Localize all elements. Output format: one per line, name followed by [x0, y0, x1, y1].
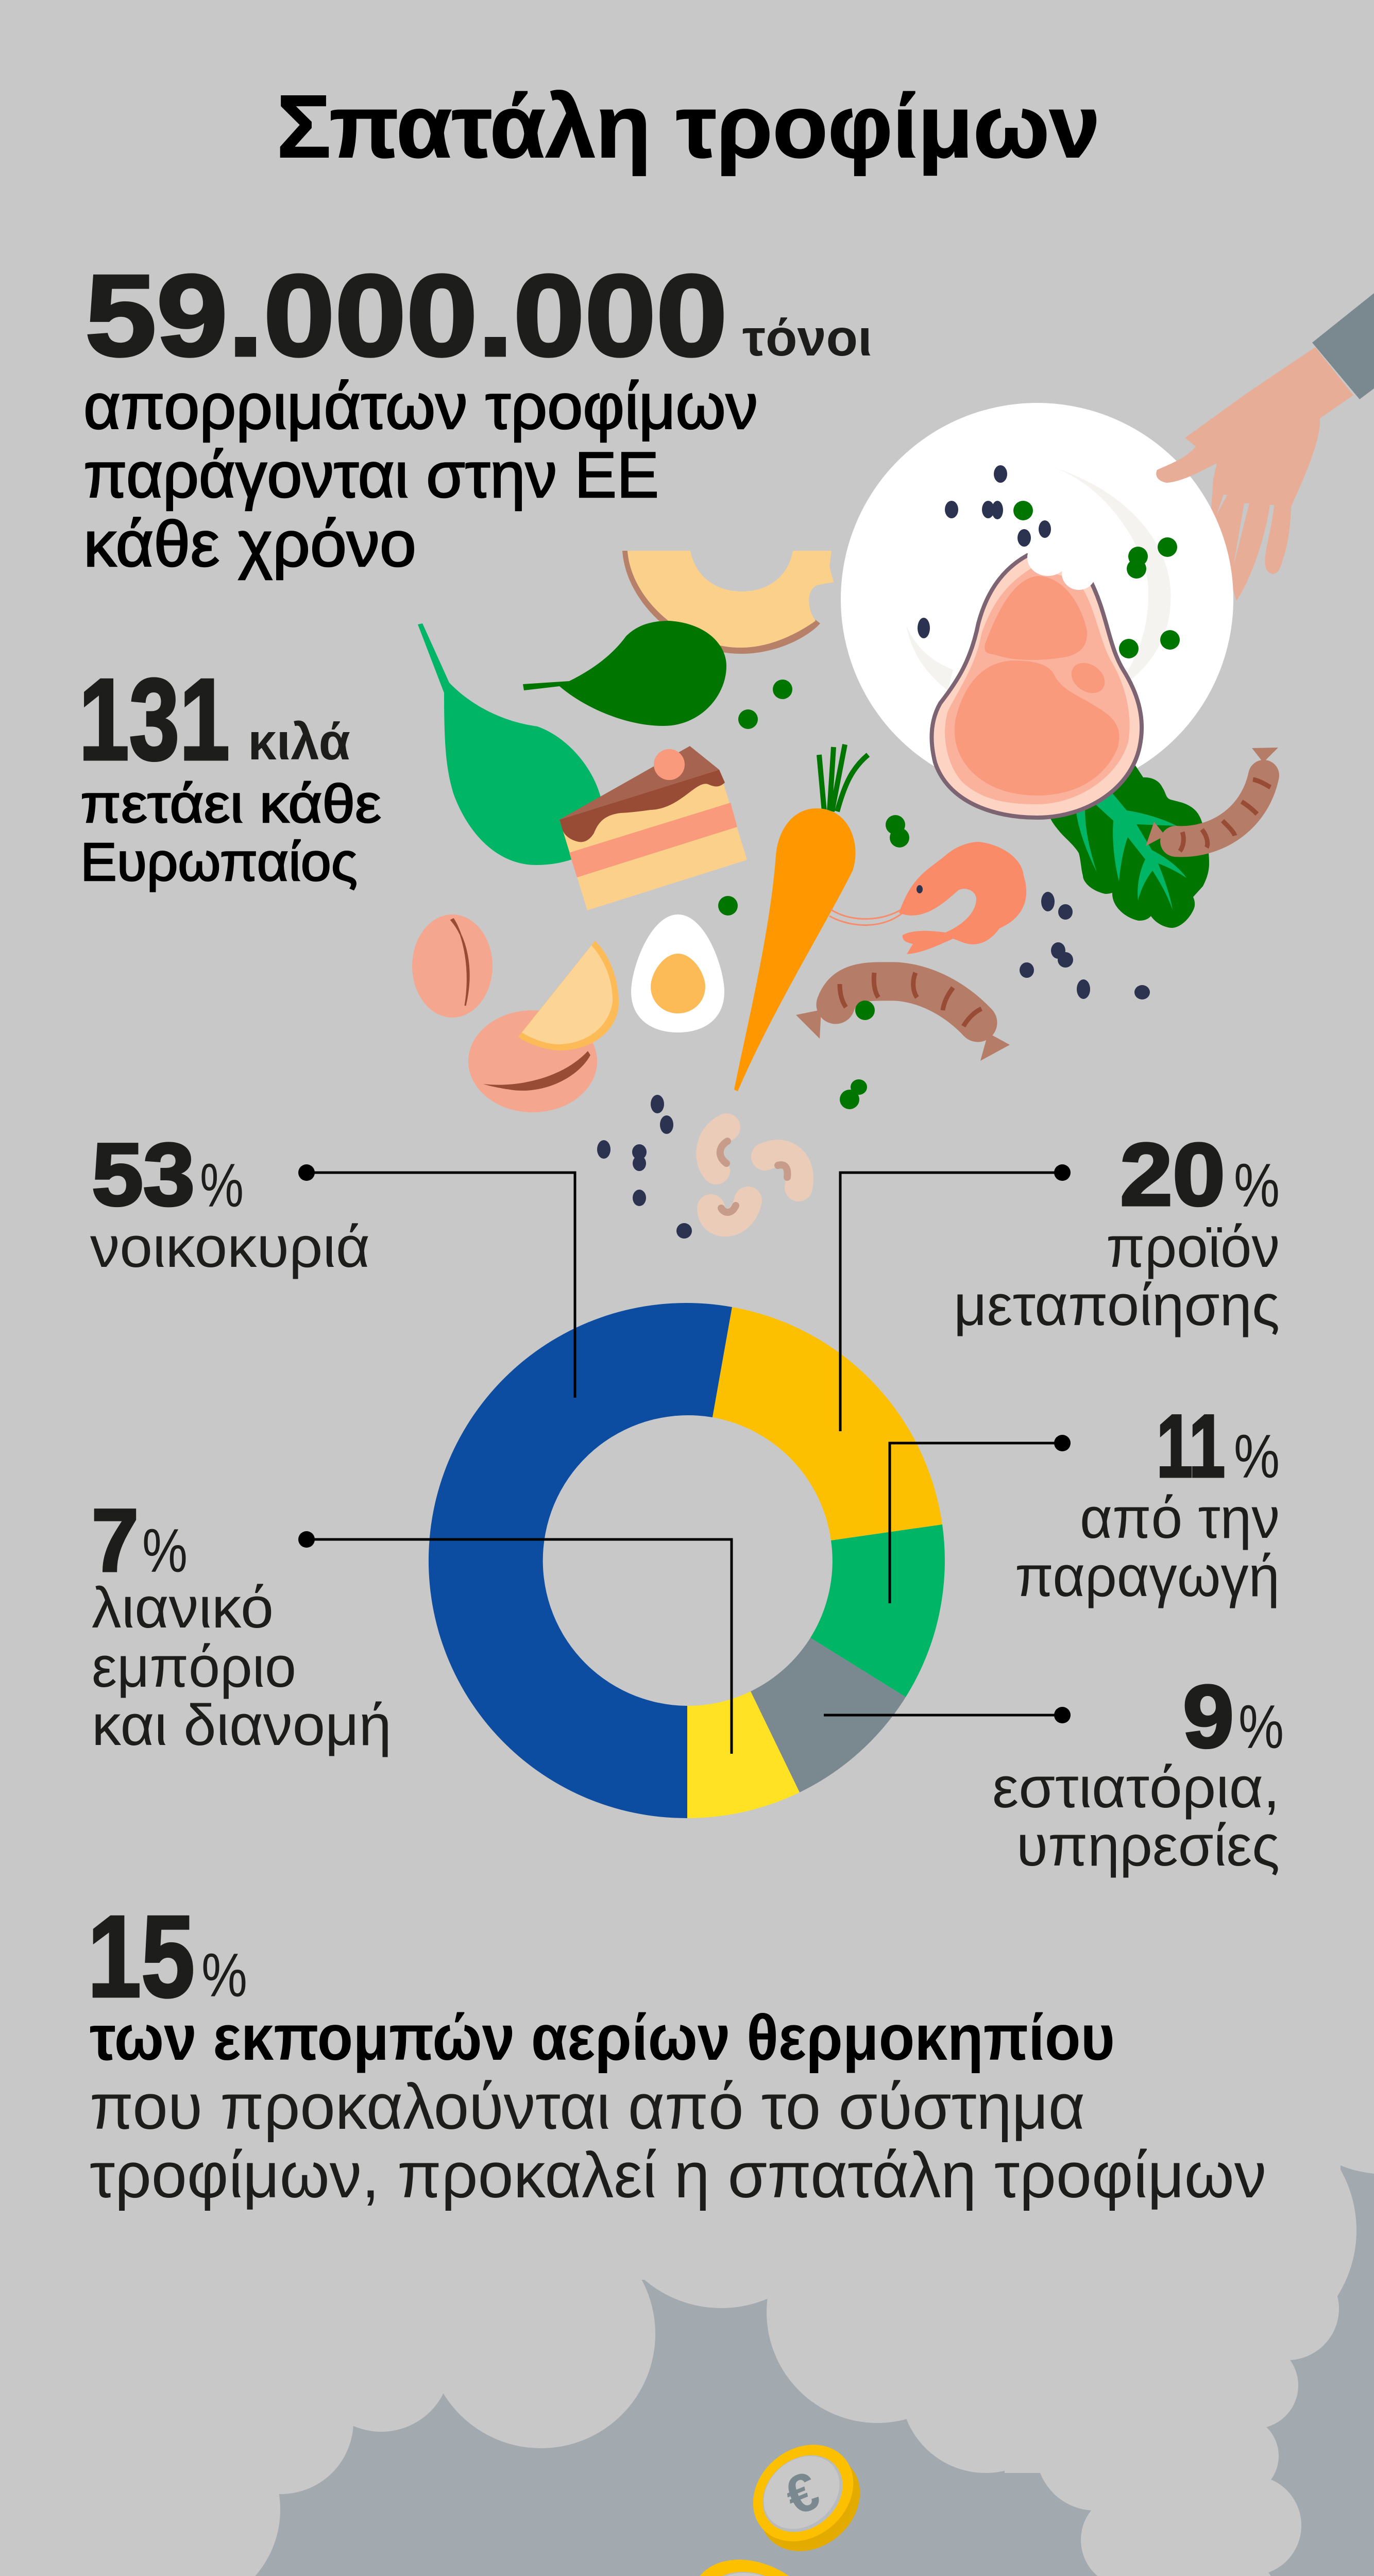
label: 20% processing: % [1234, 1151, 1280, 1220]
label: 53% households [90, 1125, 370, 1279]
label: 20% processing [954, 1125, 1280, 1337]
stat: 131 kilos [79, 654, 381, 892]
bright green leaf [418, 623, 602, 865]
coin top: € [777, 2460, 827, 2527]
scattered peas [718, 680, 909, 1109]
label: 7% retail: 7 [92, 1491, 139, 1590]
unit kilos: κιλά [248, 713, 350, 771]
label: 7% retail: λιανικό [92, 1575, 274, 1640]
thumb [1156, 394, 1288, 483]
label: 11% production: από την [1080, 1486, 1280, 1550]
description line 2: Ευρωπαίος [80, 832, 358, 892]
description line 2: παράγονται στην ΕΕ [83, 439, 659, 511]
shrimp [829, 842, 1026, 954]
cashews [710, 1127, 800, 1223]
cake slice [559, 746, 747, 910]
donut chart [429, 1303, 945, 1818]
number 131: 131 [79, 654, 230, 784]
label: 20% processing: μεταποίησης [954, 1273, 1280, 1337]
label: 7% retail: εμπόριο [92, 1635, 296, 1699]
spinach [1050, 764, 1209, 928]
stat: 15% emissions: 15 [88, 1891, 195, 2021]
label: 9% restaurants: εστιατόρια, [992, 1755, 1280, 1820]
icon: coin stack with euro coins [667, 2425, 908, 2576]
stat: 15% emissions: των εκπομπών αερίων θερμοκηπίου [90, 2002, 1115, 2074]
stat: 15% emissions: που προκαλούνται από το σύστημα [90, 2071, 1085, 2143]
label: 11% production: % [1234, 1422, 1280, 1491]
meat steak [931, 539, 1142, 818]
plate [841, 403, 1233, 795]
label: 9% restaurants: 9 [1183, 1667, 1234, 1766]
nuts [412, 914, 597, 1112]
label: 53% households: νοικοκυριά [90, 1215, 370, 1279]
stat: 59.000.000 tonnes [83, 250, 872, 580]
doughnut piece [622, 551, 834, 654]
description line 1: απορριμάτων τροφίμων [83, 371, 758, 443]
egg half [631, 914, 724, 1032]
label: 53% households: % [200, 1151, 244, 1220]
dark green leaf [523, 621, 726, 726]
hand fingers [1185, 347, 1353, 601]
seeds and peas on plate [918, 465, 1180, 658]
label: 7% retail: και διανομή [92, 1693, 392, 1757]
unit tonnes: τόνοι [742, 309, 872, 367]
label: 9% restaurants: % [1239, 1692, 1284, 1761]
coin middle [667, 2537, 843, 2576]
description line 3: κάθε χρόνο [83, 509, 416, 580]
label: 11% production: 11 [1157, 1397, 1225, 1496]
label: 7% retail [92, 1491, 392, 1757]
label: 7% retail: % [142, 1516, 188, 1585]
coin top [734, 2425, 879, 2571]
sausage right [1146, 748, 1278, 851]
label: 9% restaurants: υπηρεσίες [1016, 1814, 1280, 1878]
leader lines [298, 1164, 1071, 1754]
illustration: food waste [412, 293, 1374, 1239]
stat: 15% emissions: τροφίμων, προκαλεί η σπατάλη τροφίμων [90, 2140, 1266, 2211]
label: 53% households: 53 [92, 1125, 195, 1224]
label: 20% processing: προϊόν [1106, 1215, 1280, 1279]
sleeve [1312, 293, 1374, 399]
description line 1: πετάει κάθε [80, 774, 381, 834]
scattered seeds [597, 892, 1150, 1239]
number 59.000.000: 59.000.000 [85, 250, 727, 380]
label: 11% production: παραγωγή [1015, 1544, 1280, 1608]
title: Σπατάλη τροφίμων [277, 76, 1100, 176]
stat: 15% emissions: % [201, 1941, 247, 2010]
label: 11% production [1015, 1397, 1280, 1608]
label: 9% restaurants [992, 1667, 1284, 1878]
sausage lower [796, 973, 1010, 1061]
smoke cloud [0, 2071, 1356, 2576]
stat: 15% emissions [88, 1891, 1266, 2211]
potato wedge [518, 941, 619, 1050]
label: 20% processing: 20 [1120, 1125, 1225, 1224]
carrot [734, 744, 868, 1091]
